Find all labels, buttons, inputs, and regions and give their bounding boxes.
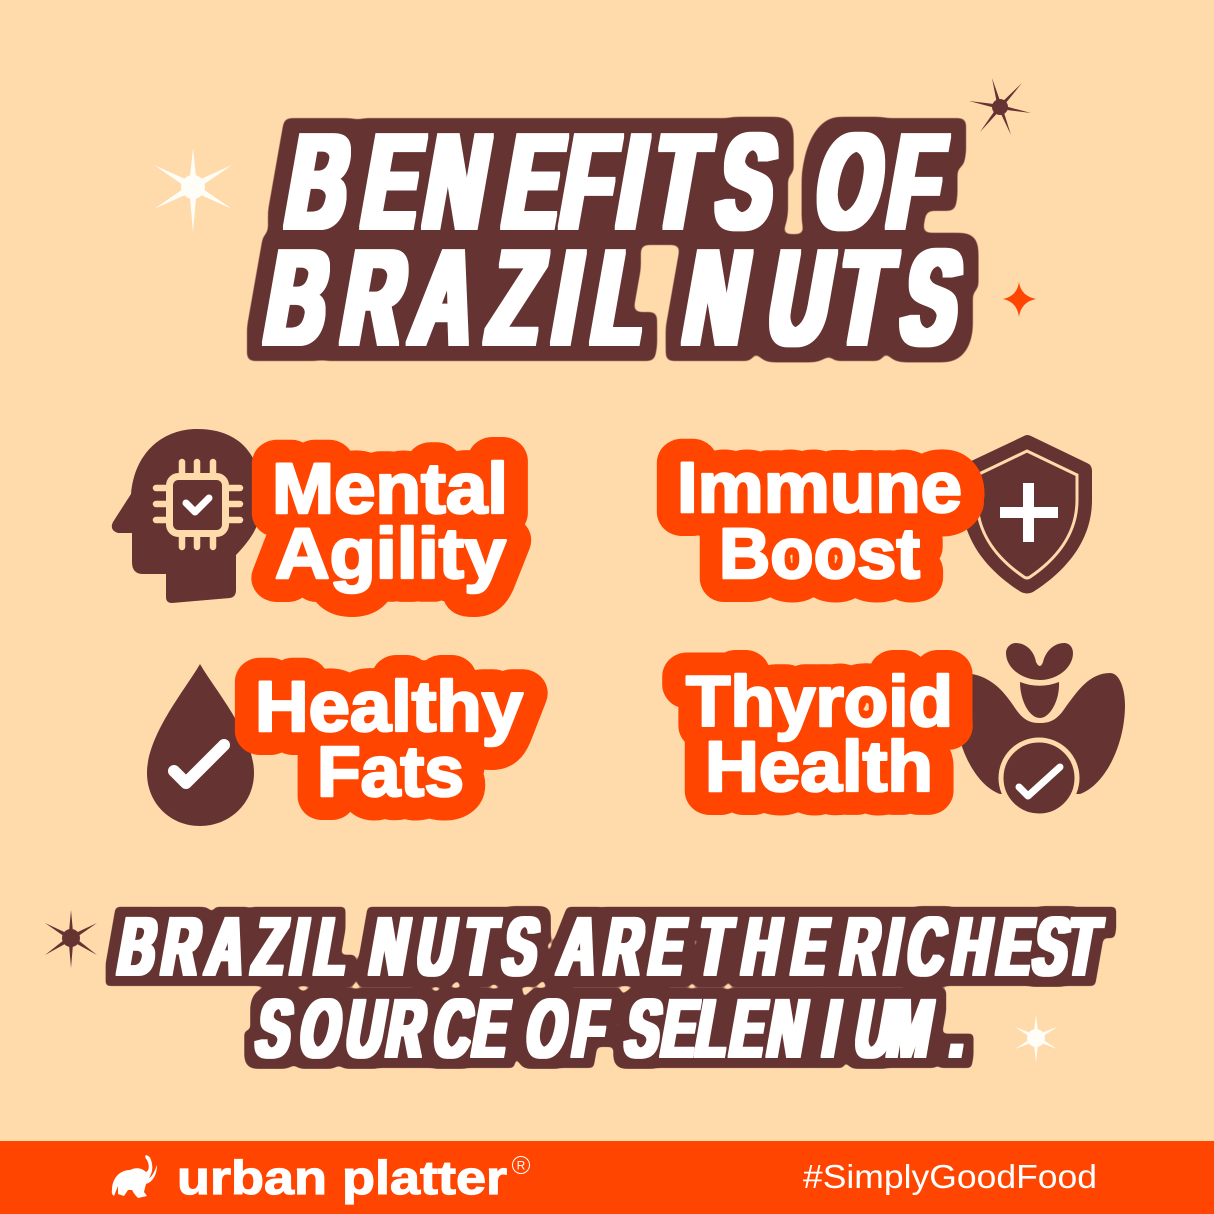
pill: Thyroid Health: Thyroid [686, 663, 953, 742]
title line 2: BRAZIL NUTS [256, 222, 973, 373]
pill: Healthy Fats: Healthy [255, 668, 524, 747]
pill: Healthy Fats [255, 668, 524, 812]
hashtag: #SimplyGoodFood [803, 1158, 1097, 1195]
callout: selenium statement [112, 899, 1107, 1075]
pill: Mental Agility: Mental [272, 450, 508, 529]
callout line 1: BRAZIL NUTS ARE THE RICHEST [112, 899, 1107, 993]
icon: head with chip [112, 429, 262, 603]
icon: oil drop with check [147, 664, 254, 826]
pill: Immune Boost [677, 449, 962, 594]
callout line 2: SOURCE OF SELENIUM. [250, 981, 975, 1075]
registered mark: R [517, 1158, 526, 1172]
sparkle: white bottom right [1015, 1014, 1057, 1063]
pill: Healthy Fats: Fats [317, 733, 464, 812]
pill: Thyroid Health [686, 663, 953, 807]
icon: shield with plus [962, 435, 1092, 594]
sparkle: orange [1003, 282, 1036, 317]
footer bar [0, 1141, 1214, 1214]
pill: Healthy Fats: Fats [317, 733, 464, 812]
pill: Mental Agility [272, 450, 508, 594]
title [256, 106, 973, 373]
sparkle: brown bottom left [45, 910, 97, 968]
pill: Immune Boost: Boost [719, 515, 920, 594]
pill: Thyroid Health: Thyroid [686, 663, 953, 742]
sparkle: brown top right [969, 78, 1031, 135]
pill: Mental Agility: Agility [275, 515, 507, 594]
pill: Mental Agility: Mental [272, 450, 508, 529]
pill: Mental Agility: Agility [275, 515, 507, 594]
pill: Healthy Fats: Healthy [255, 668, 524, 747]
logo wordmark: urban platter [177, 1151, 507, 1204]
icon: elephant logo [112, 1155, 157, 1198]
pill: Immune Boost: Boost [719, 515, 920, 594]
pill: Immune Boost: Immune [677, 449, 962, 528]
pill: Thyroid Health: Health [705, 728, 933, 807]
registered mark [512, 1156, 530, 1174]
icon: thyroid with check [955, 643, 1125, 816]
pill: Thyroid Health: Health [705, 728, 933, 807]
sparkle: white top left [154, 148, 232, 232]
pill: Immune Boost: Immune [677, 449, 962, 528]
title line 1: BENEFITS OF [277, 106, 955, 257]
